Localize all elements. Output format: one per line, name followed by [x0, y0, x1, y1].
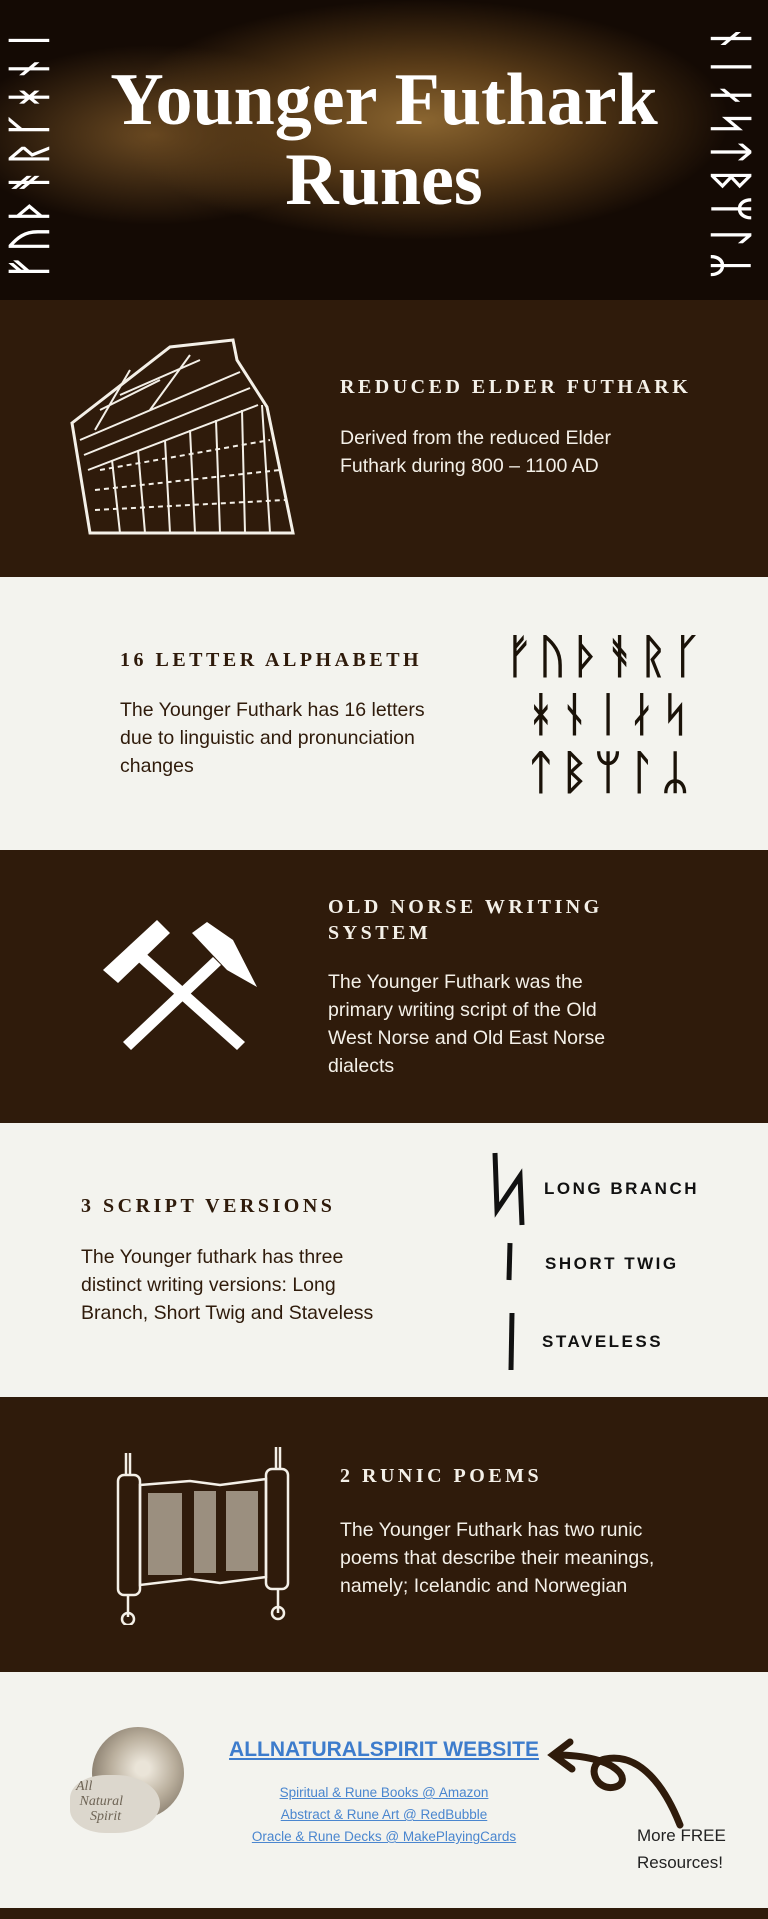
runes column right: ᚾᛁᛅᛋᛏᛒᛘᛚᛦ: [705, 25, 756, 281]
heading: REDUCED ELDER FUTHARK: [340, 376, 691, 398]
script versions list: [492, 1152, 699, 1370]
logo: all natural spirit: [70, 1727, 184, 1833]
callout text: [637, 1826, 726, 1872]
icon: crossed hammers: [103, 920, 257, 1050]
heading: 16 LETTER ALPHABETH: [120, 649, 422, 671]
panel: 16 letter alphabet: [0, 577, 768, 850]
heading: SYSTEM: [328, 922, 431, 944]
website link: ALLNATURALSPIRIT WEBSITE: [229, 1738, 539, 1761]
heading: 2 RUNIC POEMS: [340, 1465, 542, 1487]
label: staveless: STAVELESS: [542, 1332, 663, 1351]
links list: Spiritual & Rune Books @ Amazon: [280, 1785, 488, 1800]
icon: short twig: [506, 1242, 512, 1280]
panel: 2 runic poems: [0, 1397, 768, 1672]
panel: old norse writing system: [0, 850, 768, 1123]
rune alphabet grid: [505, 629, 707, 799]
text: The Younger Futhark has two runic poems that describe their meanings, namely; Icelandic and Norwegian: [340, 1519, 654, 1597]
icon: rune stone: [70, 338, 295, 534]
callout text: More FREE: [637, 1826, 726, 1845]
logo: all natural spirit: Natural: [80, 1794, 123, 1809]
panel: resources footer: [0, 1672, 768, 1908]
logo: all natural spirit: Spirit: [90, 1809, 121, 1824]
panel: 3 script versions: [0, 1123, 768, 1397]
label: short twig: SHORT TWIG: [545, 1254, 679, 1273]
text: The Younger Futhark was the primary writing script of the Old West Norse and Old East Norse dialects: [328, 971, 605, 1077]
icon: long branch rune: [492, 1152, 524, 1226]
rune alphabet grid: ᚠᚢᚦᚬᚱᚴ: [505, 629, 707, 683]
links list: [252, 1785, 516, 1844]
logo: all natural spirit: All: [76, 1779, 92, 1794]
title: Runes: [285, 139, 483, 221]
arrow: [547, 1738, 684, 1828]
text: The Younger futhark has three distinct writing versions: Long Branch, Short Twig and Staveless: [81, 1246, 373, 1324]
heading: [328, 896, 603, 944]
text: The Younger Futhark has 16 letters due to linguistic and pronunciation changes: [120, 699, 425, 777]
header: [0, 0, 768, 300]
title: Younger Futhark: [110, 59, 658, 141]
panel: reduced elder futhark: [0, 300, 768, 577]
icon: staveless: [508, 1313, 514, 1370]
title: [110, 59, 658, 221]
text: Derived from the reduced Elder Futhark during 800 – 1100 AD: [340, 427, 611, 477]
rune alphabet grid: ᛏᛒᛘᛚᛦ: [527, 745, 695, 799]
icon: scroll: [116, 1447, 290, 1625]
links list: Oracle & Rune Decks @ MakePlayingCards: [252, 1829, 516, 1844]
links list: Abstract & Rune Art @ RedBubble: [281, 1807, 487, 1822]
heading: OLD NORSE WRITING: [328, 896, 603, 918]
label: long branch: LONG BRANCH: [544, 1179, 699, 1198]
heading: 3 SCRIPT VERSIONS: [81, 1195, 335, 1217]
runes column left: ᚠᚢᚦᚬᚱᚴᚼᚾᛁ: [4, 25, 55, 281]
callout text: Resources!: [637, 1853, 723, 1872]
rune alphabet grid: ᚼᚾᛁᛅᛋ: [527, 687, 695, 741]
